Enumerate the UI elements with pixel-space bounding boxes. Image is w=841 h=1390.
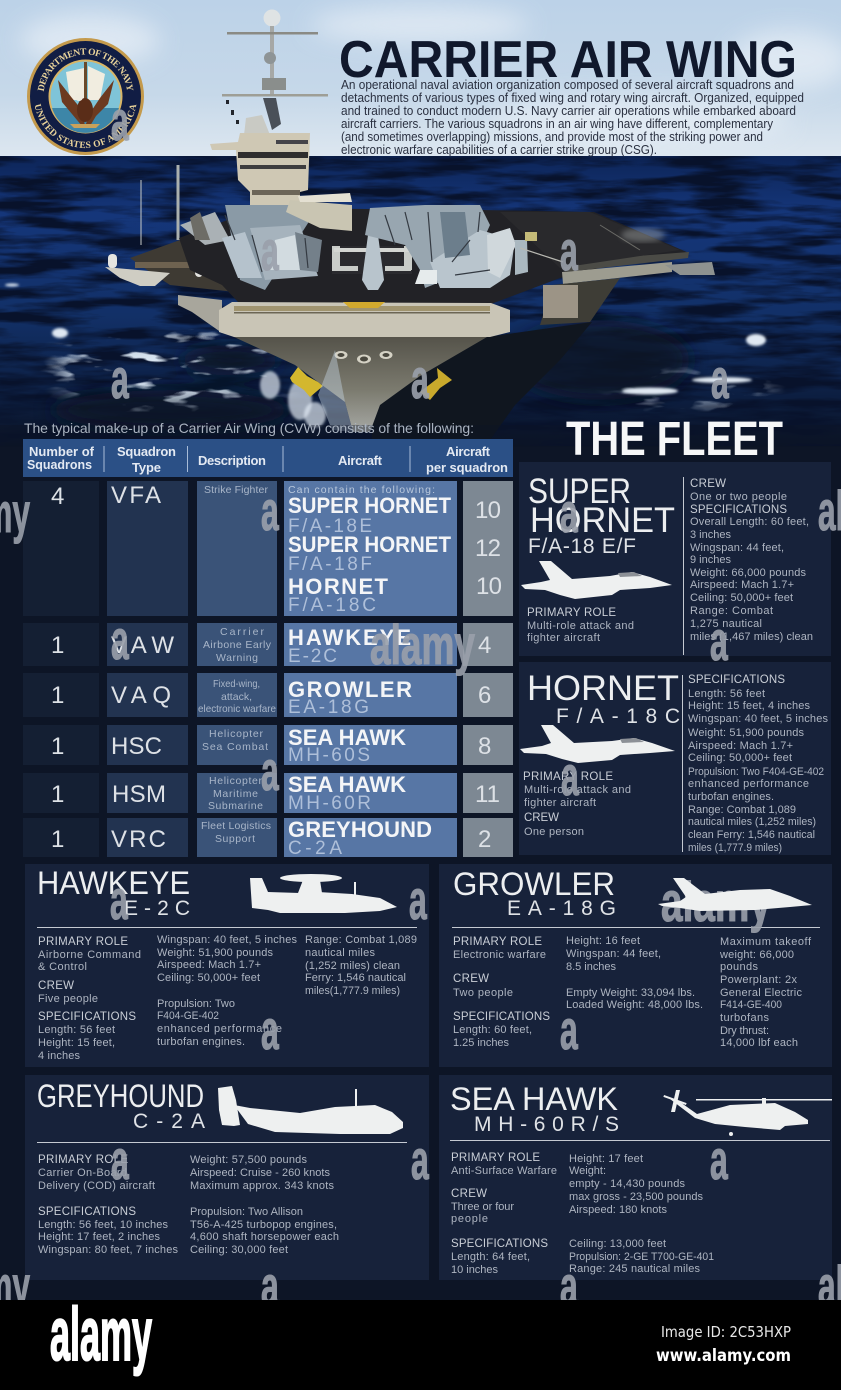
Growler powerplant: pounds [720, 961, 758, 973]
Growler powerplant: Maximum takeoff [720, 936, 812, 948]
table header: Description [198, 453, 266, 468]
Hawkeye name: HAWKEYE [37, 865, 190, 901]
icon: EA-18G silhouette over watermark [658, 878, 812, 911]
seal: Department of the Navy [27, 38, 144, 155]
row: VFA strike fighter: SUPER HORNET [288, 532, 452, 557]
Sea Hawk performance: Weight: [569, 1165, 606, 1177]
row: VRC fleet logistics: C-2A [288, 838, 342, 859]
seal: Department of the Navy: DEPARTMENT OF THE NAVY [38, 48, 134, 92]
hero photo: aircraft carrier at sea [0, 0, 841, 447]
website: www.alamy.com [656, 1346, 791, 1366]
Sea Hawk name: SEA HAWK [450, 1081, 618, 1117]
row: VAQ electronic warfare: attack, [221, 691, 252, 703]
watermarks: alamy [370, 615, 475, 677]
Greyhound primary role and specifications [38, 1154, 178, 1256]
Hornet specifications: Wingspan: 40 feet, 5 inches [688, 713, 828, 725]
Sea Hawk performance [569, 1153, 714, 1275]
Greyhound primary role and specifications: Length: 56 feet, 10 inches [38, 1219, 168, 1231]
table header: Number of [29, 444, 95, 459]
intro paragraph: An operational naval aviation organization composed of several aircraft squadrons and [341, 78, 794, 92]
Sea Hawk performance: Range: 245 nautical miles [569, 1263, 700, 1275]
row: HSC sea combat [23, 725, 513, 766]
row: HSM maritime submarine: HSM [112, 781, 166, 808]
Hawkeye range: (1,252 miles) clean [305, 960, 400, 972]
watermarks: a [561, 745, 579, 807]
table header: Aircraft [338, 453, 383, 468]
panel: Sea Hawk [439, 1075, 832, 1280]
Greyhound performance [190, 1154, 339, 1256]
Greyhound performance: Ceiling: 30,000 feet [190, 1244, 288, 1256]
Growler name: GROWLER [453, 866, 615, 902]
Super Hornet primary role: Multi-role attack and [527, 620, 634, 632]
Growler primary role, crew, specifications: 1.25 inches [453, 1037, 510, 1049]
Hornet specifications: Range: Combat 1,089 [688, 804, 796, 816]
watermarks: a [261, 480, 279, 542]
row: HSC sea combat: 1 [51, 733, 64, 760]
Growler dimensions [566, 935, 703, 1011]
Hawkeye range: nautical miles [305, 947, 376, 959]
row: VAW airborne early warning: VAW [111, 632, 174, 659]
Super Hornet crew and specifications: 1,275 nautical [690, 618, 762, 630]
Super Hornet crew and specifications: SPECIFICATIONS [690, 504, 787, 516]
Sea Hawk performance: Ceiling: 13,000 feet [569, 1238, 666, 1250]
bow band [219, 302, 510, 337]
row: VRC fleet logistics: GREYHOUND [288, 817, 432, 842]
intro paragraph: electronic warfare capabilities of a carrier strike group (CSG). [341, 143, 657, 157]
row: VAQ electronic warfare: VAQ [111, 682, 171, 709]
row: VFA strike fighter: F/A-18E [288, 516, 372, 537]
Super Hornet primary role: fighter aircraft [527, 632, 600, 644]
Hawkeye range: Range: Combat 1,089 [305, 934, 417, 946]
Greyhound primary role and specifications: PRIMARY ROLE [38, 1154, 128, 1166]
Growler powerplant: F414-GE-400 [720, 999, 782, 1011]
row: VAQ electronic warfare [23, 673, 513, 718]
Hornet specifications: Airspeed: Mach 1.7+ [688, 740, 793, 752]
watermarks: a [411, 1129, 429, 1191]
Growler primary role, crew, specifications: Electronic warfare [453, 949, 546, 961]
watermarks: a [711, 348, 729, 410]
Growler powerplant: weight: 66,000 [719, 949, 794, 961]
Greyhound name: C-2A [133, 1110, 205, 1133]
Hornet primary role and crew: Multi-role attack and [524, 784, 631, 796]
Hornet specifications: Propulsion: Two F404-GE-402 [688, 766, 824, 778]
Sea Hawk primary role, crew, specifications: CREW [451, 1188, 487, 1200]
table header: per squadron [426, 460, 508, 475]
Sea Hawk primary role, crew, specifications: people [451, 1213, 488, 1225]
Super Hornet crew and specifications: Range: Combat [690, 605, 773, 617]
Hornet specifications: miles (1,777.9 miles) [688, 842, 782, 854]
row: VAW airborne early warning: HAWKEYE [288, 625, 411, 650]
parked aircraft [180, 193, 528, 290]
Hawkeye performance: enhanced performance [157, 1023, 282, 1035]
panel: Super Hornet [519, 462, 831, 656]
seal: Department of the Navy: UNITED STATES OF AMERICA [35, 104, 136, 148]
Hawkeye primary role, crew, specifications: Height: 15 feet, [38, 1037, 115, 1049]
image id: Image ID: 2C53HXP [661, 1323, 791, 1341]
footer bar [0, 1293, 841, 1390]
Growler powerplant: Powerplant: 2x [720, 974, 798, 986]
Greyhound performance: 4,600 shaft horsepower each [190, 1231, 339, 1243]
Hawkeye primary role, crew, specifications [38, 936, 141, 1062]
Super Hornet crew and specifications: One or two people [690, 491, 787, 503]
watermarks: a [111, 1129, 129, 1191]
row: VAQ electronic warfare: electronic warfare [198, 703, 276, 715]
Super Hornet name: F/A-18 E/F [528, 535, 636, 558]
Hawkeye name [37, 865, 190, 920]
row: HSM maritime submarine: Helicopter [209, 775, 262, 787]
Hawkeye range: Ferry: 1,546 nautical [305, 972, 406, 984]
row: VFA strike fighter: F/A-18F [288, 554, 372, 575]
Super Hornet crew and specifications [690, 478, 813, 643]
row: HSC sea combat: MH-60S [288, 745, 370, 766]
Growler name [453, 866, 616, 920]
Hawkeye primary role, crew, specifications: SPECIFICATIONS [38, 1011, 136, 1023]
icon: F/A-18 E/F silhouette [521, 561, 672, 599]
watermarks: a [710, 610, 728, 672]
row: HSM maritime submarine: 1 [51, 781, 64, 808]
row: VFA strike fighter: 4 [51, 483, 64, 510]
row: HSM maritime submarine [23, 772, 513, 814]
Sea Hawk primary role, crew, specifications: Anti-Surface Warfare [451, 1165, 557, 1177]
Greyhound performance: T56-A-425 turbopop engines, [190, 1219, 337, 1231]
row: VAQ electronic warfare: GROWLER [288, 677, 412, 702]
Sea Hawk primary role, crew, specifications: SPECIFICATIONS [451, 1238, 548, 1250]
row: VFA strike fighter: 10 [475, 497, 501, 524]
Hawkeye name: E-2C [124, 897, 190, 920]
Hornet specifications: Weight: 51,900 pounds [688, 727, 804, 739]
watermarks: a [560, 482, 578, 544]
watermarks: a [111, 348, 129, 410]
Greyhound name: GREYHOUND [37, 1078, 204, 1114]
Hawkeye primary role, crew, specifications: Five people [38, 993, 98, 1005]
row: HSM maritime submarine: SEA HAWK [288, 772, 406, 797]
watermarks: a [560, 220, 578, 282]
row: HSM maritime submarine: Submarine [208, 800, 263, 812]
Super Hornet crew and specifications: Weight: 66,000 pounds [690, 567, 806, 579]
Hawkeye performance: turbofan engines. [157, 1036, 245, 1048]
Hawkeye performance: F404-GE-402 [157, 1010, 219, 1022]
row: VAW airborne early warning: Airbone Early [203, 639, 272, 651]
row: HSC sea combat: HSC [111, 733, 162, 760]
Hawkeye range: miles(1,777.9 miles) [305, 985, 400, 997]
watermarks: a [261, 999, 279, 1061]
Hawkeye primary role, crew, specifications: PRIMARY ROLE [38, 936, 128, 948]
table lead-in text: The typical make-up of a Carrier Air Wing (CVW) consists of the following: [24, 420, 474, 436]
Hornet primary role and crew: PRIMARY ROLE [523, 771, 613, 783]
intro paragraph: aircraft carriers. The various squadrons in an air wing have different, complementary [341, 117, 774, 131]
Greyhound primary role and specifications: SPECIFICATIONS [38, 1206, 136, 1218]
Growler powerplant: turbofans [720, 1012, 770, 1024]
row: VAW airborne early warning [23, 623, 513, 667]
Sea Hawk primary role, crew, specifications [451, 1152, 557, 1276]
row: VRC fleet logistics: Support [215, 833, 255, 845]
intro paragraph [341, 78, 804, 157]
Sea Hawk performance: Height: 17 feet [569, 1153, 643, 1165]
watermarks: a [110, 869, 128, 931]
Super Hornet primary role [527, 607, 634, 644]
panel: Hornet [519, 662, 831, 855]
row: VRC fleet logistics: 2 [478, 826, 491, 853]
row: VRC fleet logistics: Fleet Logistics [201, 820, 271, 832]
Growler primary role, crew, specifications: Length: 60 feet, [453, 1024, 532, 1036]
icon: F/A-18C silhouette [520, 725, 675, 763]
row: VFA strike fighter: 12 [475, 535, 501, 562]
watermarks: a [411, 348, 429, 410]
Greyhound primary role and specifications: Carrier On-Board [38, 1167, 127, 1179]
table: carrier air wing make-up [23, 439, 513, 859]
icon: MH-60 helicopter silhouette [663, 1090, 832, 1136]
panel: Growler [439, 864, 832, 1067]
Super Hornet crew and specifications: Ceiling: 50,000+ feet [690, 592, 793, 604]
row: HSM maritime submarine: 11 [475, 781, 500, 808]
island [210, 133, 310, 215]
row: VRC fleet logistics: VRC [111, 826, 166, 853]
row: VRC fleet logistics: 1 [51, 826, 64, 853]
Hawkeye performance [157, 934, 298, 1048]
Hornet name [527, 669, 680, 728]
Greyhound performance: Propulsion: Two Allison [190, 1206, 303, 1218]
watermarks: a [710, 1129, 728, 1191]
Greyhound primary role and specifications: Wingspan: 80 feet, 7 inches [38, 1244, 178, 1256]
Hornet primary role and crew: CREW [524, 812, 559, 824]
Growler primary role, crew, specifications: Two people [453, 987, 513, 999]
Super Hornet primary role: PRIMARY ROLE [527, 607, 616, 619]
alamy logo: alamy [50, 1293, 152, 1377]
row: VAQ electronic warfare: 6 [478, 682, 491, 709]
watermarks: a [560, 1255, 578, 1317]
table header: Type [132, 460, 161, 475]
Hornet primary role and crew [523, 771, 631, 838]
Hawkeye primary role, crew, specifications: & Control [38, 961, 87, 973]
Greyhound primary role and specifications: Height: 17 feet, 2 inches [38, 1231, 160, 1243]
row: HSC sea combat: SEA HAWK [288, 725, 406, 750]
Greyhound primary role and specifications: Delivery (COD) aircraft [38, 1180, 155, 1192]
Growler name: EA-18G [507, 897, 616, 920]
icon: C-2A silhouette [218, 1086, 403, 1134]
watermarks: a [111, 90, 129, 152]
Hornet specifications: turbofan engines. [688, 791, 774, 803]
left sponson [130, 240, 240, 292]
row: VFA strike fighter: Strike Fighter [204, 484, 268, 496]
Hornet specifications: Height: 15 feet, 4 inches [688, 700, 810, 712]
row: VAQ electronic warfare: EA-18G [288, 697, 369, 718]
Sea Hawk name [450, 1081, 619, 1136]
row: VFA strike fighter: Can contain the following: [288, 484, 435, 496]
Super Hornet crew and specifications: 9 inches [690, 554, 732, 566]
Hornet specifications: Ceiling: 50,000+ feet [688, 752, 792, 764]
Growler powerplant: Dry thrust: [720, 1025, 769, 1037]
Sea Hawk primary role, crew, specifications: Three or four [451, 1201, 514, 1213]
sea foam [4, 282, 782, 430]
Hornet specifications: Length: 56 feet [688, 688, 765, 700]
table header: Squadrons [27, 457, 92, 472]
Growler dimensions: Loaded Weight: 48,000 lbs. [566, 999, 703, 1011]
row: VAW airborne early warning: 4 [478, 632, 491, 659]
row: VFA strike fighter: 10 [476, 573, 502, 600]
Greyhound performance: Airspeed: Cruise - 260 knots [190, 1167, 330, 1179]
Hawkeye performance: Ceiling: 50,000+ feet [157, 972, 260, 984]
Super Hornet name [528, 472, 675, 558]
dark swell behind bow [50, 320, 690, 430]
row: VFA strike fighter: VFA [111, 482, 161, 509]
Growler powerplant [719, 936, 812, 1049]
panel: Hawkeye [25, 864, 429, 1067]
Hornet specifications: clean Ferry: 1,546 nautical [688, 829, 815, 841]
icon: E-2C silhouette [250, 874, 397, 913]
Sea Hawk primary role, crew, specifications: Length: 64 feet, [451, 1251, 530, 1263]
table header: Aircraft [446, 444, 491, 459]
heading: the fleet: THE FLEET [566, 413, 783, 466]
row: VFA strike fighter: F/A-18C [288, 595, 376, 616]
intro paragraph: detachments of various types of fixed wing and rotary wing aircraft. Organized, equipped [341, 91, 804, 105]
Sea Hawk primary role, crew, specifications: PRIMARY ROLE [451, 1152, 540, 1164]
Greyhound performance: Maximum approx. 343 knots [190, 1180, 334, 1192]
Hawkeye primary role, crew, specifications: Length: 56 feet [38, 1024, 115, 1036]
panel: Greyhound [25, 1075, 429, 1280]
row: VAW airborne early warning: 1 [51, 632, 64, 659]
Sea Hawk performance: empty - 14,430 pounds [569, 1178, 686, 1190]
Hornet specifications: SPECIFICATIONS [688, 674, 785, 686]
intro paragraph: and trained to conduct modern U.S. Navy carrier air operations while embarked aboard [341, 104, 796, 118]
Greyhound name [37, 1078, 205, 1133]
row: VAW airborne early warning: Warning [216, 652, 258, 664]
Growler powerplant: General Electric [720, 987, 802, 999]
Growler dimensions: Height: 16 feet [566, 935, 640, 947]
Growler powerplant: 14,000 lbf each [720, 1037, 798, 1049]
Super Hornet crew and specifications: Wingspan: 44 feet, [690, 542, 784, 554]
row: VAW airborne early warning: E-2C [288, 646, 337, 667]
Sea Hawk primary role, crew, specifications: 10 inches [451, 1264, 498, 1276]
Hornet specifications: enhanced performance [688, 778, 809, 790]
watermarks: a [261, 1255, 279, 1317]
Super Hornet crew and specifications: 3 inches [690, 529, 732, 541]
row: VAQ electronic warfare: 1 [51, 682, 64, 709]
row: VAW airborne early warning: Carrier [220, 626, 264, 638]
Super Hornet name: HORNET [530, 501, 675, 540]
row: HSC sea combat: Helicopter [209, 728, 264, 740]
table header: Squadron [117, 444, 176, 459]
watermarks: a [111, 609, 129, 671]
mast [222, 10, 328, 135]
table header [23, 439, 513, 477]
Growler primary role, crew, specifications [453, 936, 550, 1049]
row: HSC sea combat: 8 [478, 733, 491, 760]
Sea Hawk name: MH-60R/S [474, 1113, 619, 1136]
Hornet specifications [688, 674, 828, 854]
Hawkeye primary role, crew, specifications: 4 inches [38, 1050, 80, 1062]
watermarks: alamy [661, 872, 771, 934]
row: VRC fleet logistics [23, 817, 513, 859]
watermarks: a [261, 740, 279, 802]
ship shadow on water [372, 322, 592, 440]
Growler primary role, crew, specifications: CREW [453, 973, 489, 985]
row: HSM maritime submarine: MH-60R [288, 793, 371, 814]
intro paragraph: (and sometimes overlapping) missions, and provide most of the striking power and [341, 130, 763, 144]
Growler primary role, crew, specifications: PRIMARY ROLE [453, 936, 542, 948]
row: VFA strike fighter [23, 481, 513, 616]
Sea Hawk performance: Propulsion: 2-GE T700-GE-401 [569, 1251, 714, 1263]
row: VFA strike fighter: HORNET [288, 574, 389, 599]
row: VFA strike fighter: SUPER HORNET [288, 493, 452, 518]
Hawkeye performance: Wingspan: 40 feet, 5 inches [157, 934, 298, 946]
Growler dimensions: 8.5 inches [566, 961, 616, 973]
Hornet primary role and crew: One person [524, 826, 584, 838]
watermarks: a [261, 220, 279, 282]
Sea Hawk performance: Airspeed: 180 knots [569, 1204, 668, 1216]
Sea Hawk performance: max gross - 23,500 pounds [569, 1191, 704, 1203]
watermarks: a [560, 999, 578, 1061]
Hawkeye range [305, 934, 417, 997]
radio masts [141, 165, 178, 245]
Super Hornet crew and specifications: Airspeed: Mach 1.7+ [690, 579, 794, 591]
watermarks: a [409, 869, 427, 931]
Greyhound performance: Weight: 57,500 pounds [190, 1154, 308, 1166]
Hawkeye performance: Propulsion: Two [157, 998, 235, 1010]
Hornet name: HORNET [527, 669, 679, 708]
hull [234, 337, 487, 432]
flight deck [179, 208, 689, 304]
Hawkeye primary role, crew, specifications: CREW [38, 980, 74, 992]
Hawkeye primary role, crew, specifications: Airborne Command [38, 949, 141, 961]
Growler dimensions: Empty Weight: 33,094 lbs. [566, 987, 695, 999]
Super Hornet name: SUPER [528, 472, 631, 511]
Hornet primary role and crew: fighter aircraft [524, 797, 596, 809]
Hawkeye performance: Weight: 51,900 pounds [157, 947, 274, 959]
Hawkeye performance: Airspeed: Mach 1.7+ [157, 959, 261, 971]
Hornet specifications: nautical miles (1,252 miles) [688, 816, 816, 828]
Super Hornet crew and specifications: Overall Length: 60 feet, [690, 516, 809, 528]
Growler primary role, crew, specifications: SPECIFICATIONS [453, 1011, 550, 1023]
Super Hornet crew and specifications: miles (1,467 miles) clean [690, 631, 813, 643]
row: HSM maritime submarine: Maritime [213, 788, 258, 800]
row: VAQ electronic warfare: Fixed-wing, [213, 678, 260, 690]
Hornet name: F/A-18C [556, 705, 680, 728]
Growler dimensions: Wingspan: 44 feet, [566, 948, 661, 960]
Super Hornet crew and specifications: CREW [690, 478, 726, 490]
row: HSC sea combat: Sea Combat [202, 741, 268, 753]
right sponson [562, 262, 672, 284]
title: CARRIER AIR WING [339, 31, 797, 89]
